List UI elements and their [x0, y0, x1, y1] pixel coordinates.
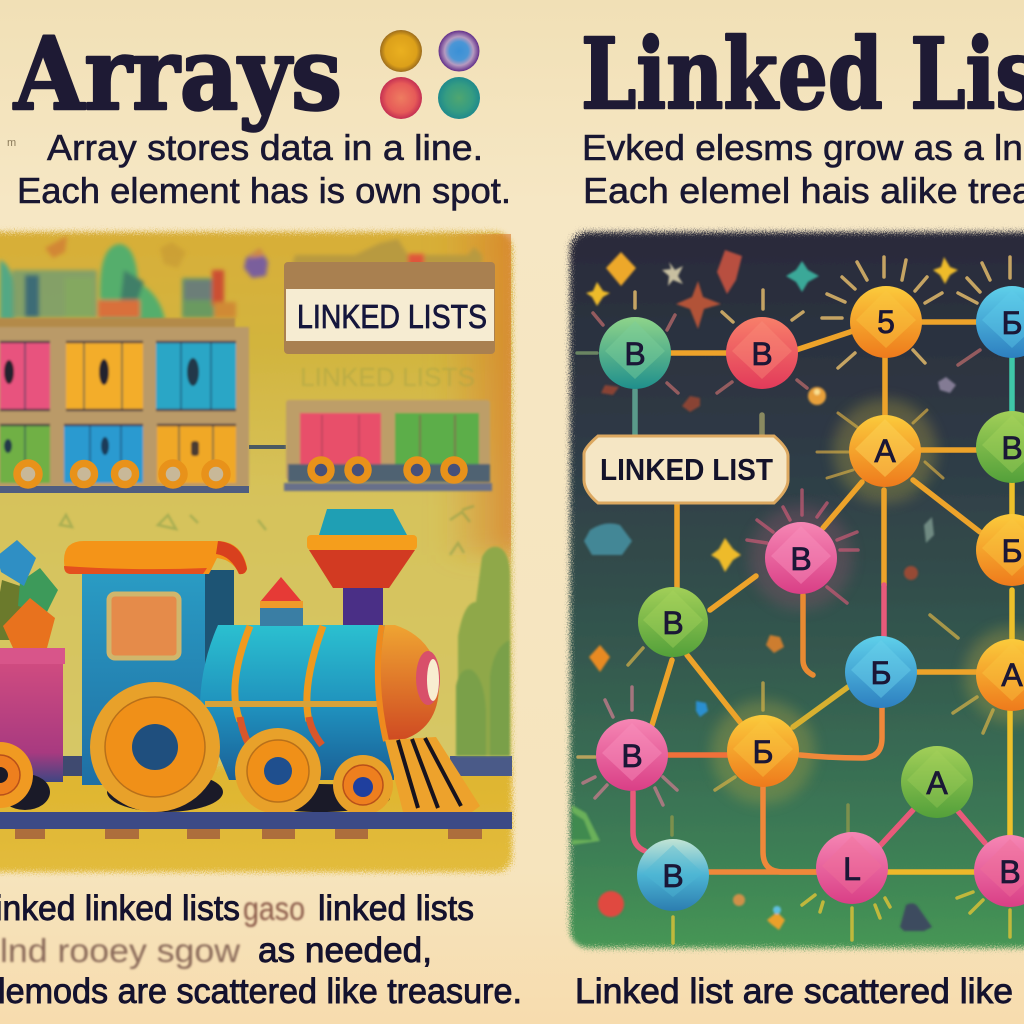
smokestack — [307, 509, 417, 625]
heading: Arrays: Arrays — [13, 15, 342, 133]
wagon with linked blocks — [284, 400, 492, 491]
caption: linked lists left: inked linked lists — [0, 889, 240, 928]
boiler bands — [205, 626, 377, 745]
floor bar behind train — [450, 756, 512, 776]
rail track — [0, 812, 512, 839]
node: green B — [599, 317, 671, 389]
node: red B: B — [751, 336, 773, 372]
node: blue B centre — [845, 636, 917, 708]
text block: array description: m — [7, 137, 16, 149]
locomotive — [0, 509, 480, 815]
node: green B left: B — [662, 605, 684, 641]
rear wheel — [0, 742, 50, 810]
panel background — [0, 232, 512, 872]
node: green B right — [976, 411, 1024, 483]
node: orange B right — [976, 514, 1024, 586]
pink wagon — [0, 648, 85, 782]
label: Linked List: LINKED LIST — [600, 452, 773, 487]
connector between shelf and wagon — [249, 445, 286, 449]
text block: array description: Array stores data in a line. — [47, 127, 483, 168]
faint sign reflection: LINKED LISTS — [300, 362, 475, 392]
scattered sparkles — [572, 250, 958, 931]
caption: linked lists left — [0, 889, 522, 1011]
node: pink L: L — [843, 851, 861, 887]
caption: linked lists left: gaso — [243, 890, 305, 927]
node: orange B lower — [727, 715, 799, 787]
node: pink L — [816, 832, 888, 904]
node: blue B — [976, 286, 1024, 358]
caption: linked lists left: linked lists — [318, 889, 474, 928]
cab — [64, 541, 247, 785]
boiler — [200, 625, 394, 780]
burst rays — [577, 257, 1010, 943]
node: orange A right — [976, 639, 1024, 711]
wheels under shelf — [17, 463, 227, 485]
node: pink B centre — [765, 522, 837, 594]
soft glows — [711, 399, 1024, 804]
orange right edge tint — [452, 234, 511, 569]
connector lines — [633, 322, 1012, 872]
node: orange 5: 5 — [877, 304, 895, 340]
node: pink B lower left — [596, 719, 668, 791]
node: pink B right — [974, 835, 1024, 907]
bush — [456, 547, 510, 756]
wheel shadows — [107, 772, 223, 812]
node: blue B: Б — [1002, 305, 1022, 341]
node: red B — [726, 317, 798, 389]
rail under shelf — [0, 486, 249, 493]
shelf-top decorations — [0, 236, 482, 324]
node: green A: A — [926, 765, 948, 801]
cab window — [109, 594, 179, 658]
middle wheel — [235, 728, 321, 814]
icon: four coloured dots — [380, 30, 480, 119]
panel: array train illustration — [0, 215, 530, 872]
node: blue B centre: Б — [870, 655, 892, 691]
caption: linked lists left: as needed, — [258, 931, 432, 970]
cowcatcher — [385, 737, 480, 812]
nose — [378, 625, 440, 741]
gem pile — [0, 540, 58, 648]
node: green B right: B — [1001, 430, 1023, 466]
text block: array description — [7, 127, 511, 211]
label: Linked List — [584, 436, 788, 503]
caption: linked lists left: lemods are scattered like treasure. — [0, 972, 522, 1011]
shelf with array blocks — [0, 318, 249, 487]
node: blue B bottom: B — [662, 858, 684, 894]
node: orange A right: A — [1001, 657, 1023, 693]
sign: Linked Lists: LINKED LISTS — [297, 298, 487, 335]
node: yellow A: A — [874, 433, 896, 469]
node: blue B bottom — [637, 839, 709, 911]
dome — [260, 577, 303, 626]
node: orange B right: Б — [1002, 533, 1022, 569]
text block: array description: Each element has is own spot. — [17, 170, 511, 211]
node: green A — [901, 746, 973, 818]
node: pink B lower left: B — [621, 738, 643, 774]
node: green B left — [638, 587, 708, 657]
node: orange B lower: Б — [752, 734, 774, 770]
wall doodles — [60, 506, 474, 555]
small wheel — [333, 755, 393, 815]
wagon wheels — [311, 460, 464, 480]
node: pink B right: B — [999, 854, 1021, 890]
big wheel — [90, 682, 220, 812]
text block: linked list description: Each elemel hais alike trea — [583, 170, 1024, 211]
sign: Linked Lists — [284, 262, 495, 354]
panel: linked list network — [570, 232, 1024, 948]
node: yellow A — [849, 415, 921, 487]
text block: linked list description — [582, 127, 1024, 211]
node: pink B centre: B — [790, 541, 812, 577]
caption: linked lists left: lnd rooey sgow — [0, 932, 240, 969]
panel background — [570, 232, 1024, 948]
node: orange 5 — [850, 286, 922, 358]
node: green B: B — [624, 336, 646, 372]
caption: linked lists right: Linked list are scattered like — [575, 972, 1013, 1011]
